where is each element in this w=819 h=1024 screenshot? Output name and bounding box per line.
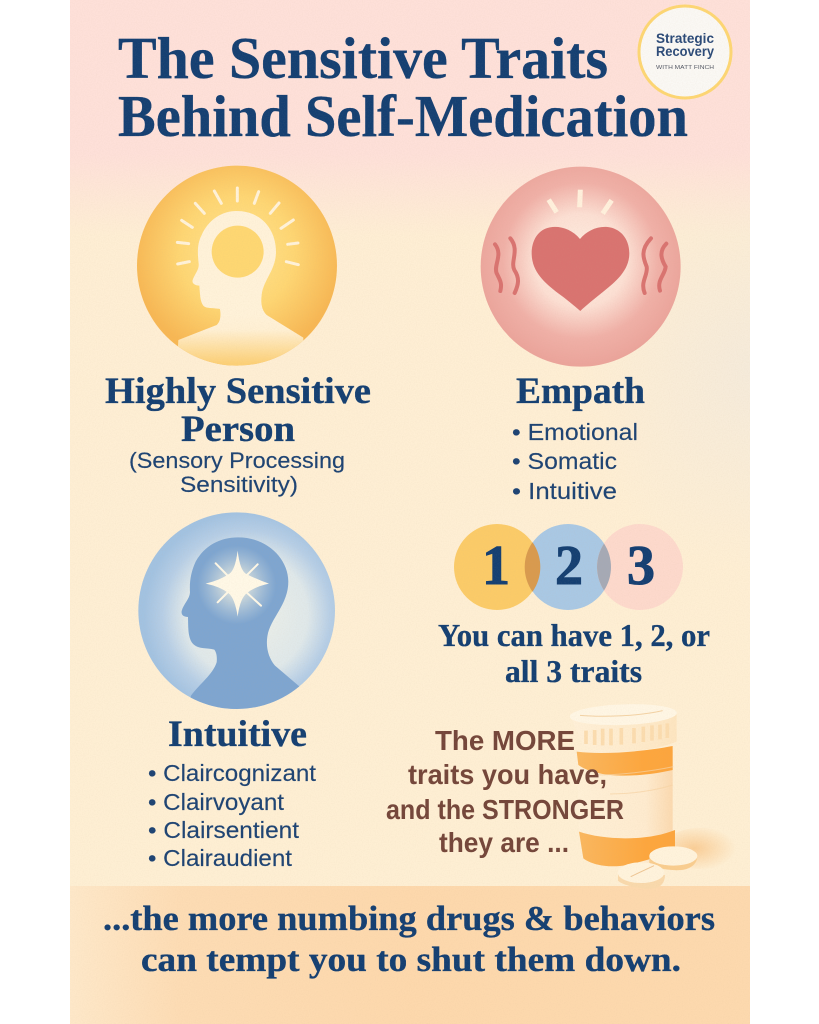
list: empath types bbox=[512, 419, 638, 504]
title: Behind Self-Medication bbox=[118, 83, 688, 149]
heading: highly sensitive person bbox=[105, 371, 371, 450]
conclusion text bbox=[103, 899, 715, 979]
title bbox=[118, 25, 688, 149]
logo badge: Strategic bbox=[656, 30, 714, 46]
text: sensory processing sensitivity: (Sensory Processing bbox=[129, 448, 345, 473]
logo badge bbox=[639, 6, 731, 98]
caption: you can have 1, 2, or all 3 traits: You can have 1, 2, or bbox=[438, 617, 710, 653]
conclusion text: can tempt you to shut them down. bbox=[141, 940, 681, 979]
list: intuitive types: • Clairaudient bbox=[148, 845, 293, 871]
list: intuitive types bbox=[148, 760, 317, 871]
venn diagram: 1 2 3: 1 bbox=[482, 535, 510, 597]
logo badge: WITH MATT FINCH bbox=[656, 65, 714, 71]
venn diagram: 1 2 3 bbox=[454, 524, 683, 610]
heading: highly sensitive person: Highly Sensitive bbox=[105, 371, 371, 412]
icon: pill bottle bbox=[569, 702, 740, 889]
caption: you can have 1, 2, or all 3 traits: all 3 traits bbox=[505, 653, 642, 689]
list: intuitive types: • Clairvoyant bbox=[148, 789, 285, 815]
text: sensory processing sensitivity bbox=[129, 448, 345, 497]
callout: the more traits you have: they are ... bbox=[439, 827, 569, 858]
venn diagram: 1 2 3: 3 bbox=[627, 535, 655, 597]
list: intuitive types: • Clairsentient bbox=[148, 817, 300, 843]
callout: the more traits you have: The MORE bbox=[435, 725, 575, 756]
venn diagram: 1 2 3: 2 bbox=[555, 535, 583, 597]
text: sensory processing sensitivity: Sensitivity) bbox=[180, 472, 298, 497]
heading: empath: Empath bbox=[516, 371, 645, 412]
heading: highly sensitive person: Person bbox=[181, 409, 295, 450]
title: The Sensitive Traits bbox=[118, 25, 608, 91]
caption: you can have 1, 2, or all 3 traits bbox=[438, 617, 710, 689]
conclusion text: ...the more numbing drugs & behaviors bbox=[103, 899, 715, 938]
heading: intuitive: Intuitive bbox=[168, 714, 307, 755]
icon: empath heart bbox=[481, 167, 681, 367]
callout: the more traits you have: and the STRONGER bbox=[386, 794, 624, 825]
logo badge: Recovery bbox=[656, 43, 714, 59]
callout: the more traits you have: traits you have, bbox=[408, 759, 607, 790]
bottom band bbox=[70, 886, 750, 1024]
list: intuitive types: • Claircognizant bbox=[148, 760, 317, 786]
icon: highly sensitive person head with rays bbox=[137, 166, 337, 368]
icon: intuitive head with star bbox=[138, 512, 335, 718]
callout: the more traits you have bbox=[386, 725, 624, 858]
list: empath types: • Emotional bbox=[512, 419, 638, 445]
list: empath types: • Somatic bbox=[512, 448, 617, 474]
list: empath types: • Intuitive bbox=[512, 478, 617, 504]
